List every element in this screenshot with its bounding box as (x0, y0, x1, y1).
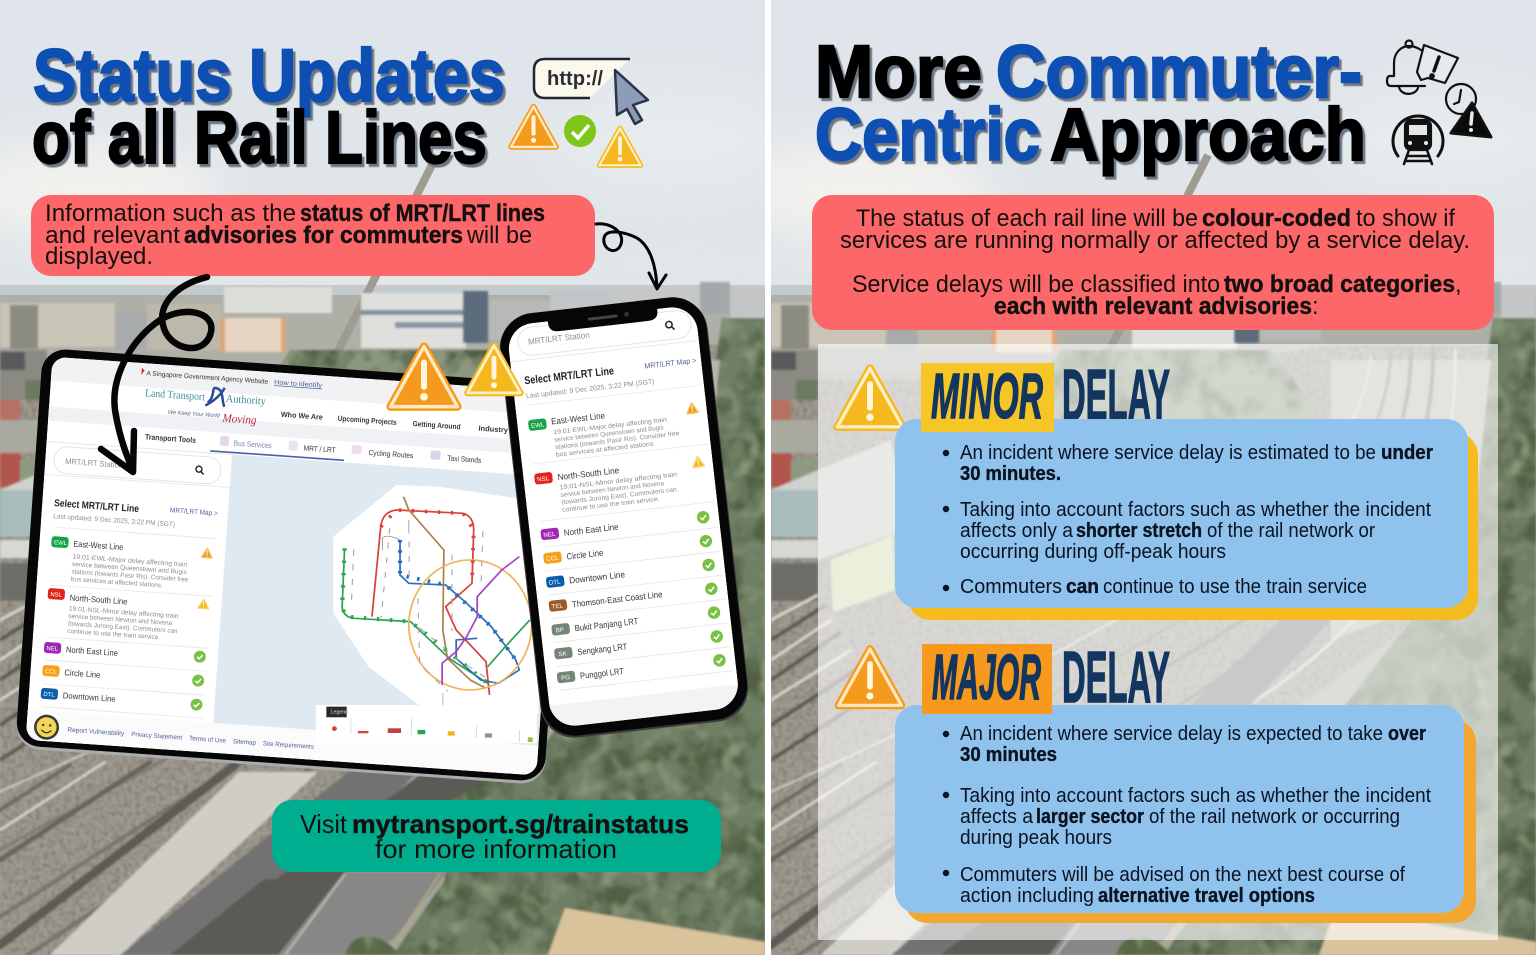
tablet body and screen: Taxi Stands (447, 454, 482, 465)
phone mockup: continue to use the train service. (562, 496, 660, 514)
tablet body and screen: DTL (43, 692, 55, 699)
icon: bell (1387, 40, 1425, 94)
icon: orange warning (839, 649, 901, 705)
callout: colour coded intro: two broad categories (1224, 271, 1455, 298)
phone mockup: EWL (531, 421, 545, 430)
tablet body and screen: continue to use the train service. (67, 628, 160, 641)
callout: colour coded intro (812, 195, 1494, 330)
panel: minor delay details (895, 419, 1478, 620)
phone mockup: NSL (537, 475, 550, 483)
phone mockup: Downtown Line (569, 569, 626, 585)
callout: colour coded intro: The status of each rail line will be (856, 205, 1198, 232)
phone mockup: Bukit Panjang LRT (574, 616, 639, 633)
callout: visit mytransport (272, 800, 721, 872)
tablet body and screen: MRT/LRT Map > (170, 507, 218, 518)
panel: minor delay details: An incident where service delay is estimated to be (960, 442, 1376, 464)
phone mockup: North East Line (563, 522, 619, 538)
tablet body and screen: North East Line (66, 644, 118, 658)
tablet body and screen: MRT/LRT Station (65, 457, 123, 470)
panel: minor delay details: affects only a (960, 520, 1074, 542)
tag: major: MAJOR (932, 641, 1041, 713)
tablet body and screen: East-West Line (73, 539, 124, 552)
section: major delay (839, 638, 1476, 923)
icon: large orange warning on tablet (391, 347, 457, 407)
callout: visit mytransport: mytransport.sg/trainstatus (352, 809, 689, 839)
tablet body and screen: NSL (50, 592, 63, 599)
title: More Commuter-Centric Approach (815, 30, 1366, 176)
tablet body and screen: North-South Line (69, 592, 128, 607)
phone mockup: 19:01-NSL-Minor delay affecting train (559, 471, 678, 491)
tablet body and screen: Sitemap (233, 738, 257, 747)
tablet body and screen: 19:01-NSL-Minor delay affecting train (69, 605, 179, 620)
arrow: callout to phone (596, 224, 666, 289)
title: Status Updates of all Rail Lines: of all Rail Lines (32, 96, 487, 179)
panel: major delay details: affects a (960, 806, 1034, 828)
tablet body and screen: Site Requirements (263, 740, 315, 751)
tablet body and screen: We Keep Your World (168, 410, 220, 420)
title: More Commuter-Centric Approach: Centric (815, 93, 1040, 176)
tablet body and screen (15, 348, 572, 785)
section: minor delay (837, 356, 1478, 620)
phone mockup: PG (561, 674, 571, 682)
phone mockup: Select MRT/LRT Line (524, 365, 615, 387)
tablet body and screen: service between Queenstown and Bugis (72, 561, 188, 576)
tablet body and screen: bus services at affected stations. (71, 576, 163, 589)
phone mockup: service between Newton and Novena (560, 480, 665, 499)
tablet body and screen: 19:01-EWL-Major delay affecting train (72, 554, 188, 569)
title: More Commuter-Centric Approach: Approach (1050, 93, 1366, 176)
callout: information intro: and relevant (45, 222, 180, 249)
panel: major delay details: over (1388, 723, 1426, 745)
tablet body and screen: Land Transport (145, 387, 205, 403)
tablet body and screen: Getting Around (412, 419, 461, 431)
tag: minor: MINOR (931, 360, 1043, 432)
phone mockup: East-West Line (551, 410, 605, 427)
phone mockup: Circle Line (566, 548, 604, 562)
panel: minor delay details: Commuters (960, 576, 1062, 598)
icon: address bar: http:// (547, 68, 603, 90)
tablet body and screen: Select MRT/LRT Line (54, 498, 140, 515)
tablet body and screen: Industry (478, 424, 509, 435)
MRT network map (316, 485, 540, 743)
phone mockup: stations (towards Pasir Ris). Consider free (555, 430, 680, 451)
icon: train (1393, 116, 1443, 164)
tablet body and screen: Moving (221, 411, 257, 427)
icon: alert speech bubble (1417, 45, 1458, 83)
tablet body and screen: A Singapore Government Agency Website (146, 370, 269, 386)
phone mockup: Last updated: 9 Dec 2025, 3:22 PM (SGT) (526, 379, 655, 400)
tablet body and screen: Bus Services (234, 439, 272, 450)
icon: yellow warning between devices (468, 346, 520, 393)
panel: minor delay details: Taking into account factors such as whether the incident (960, 499, 1431, 521)
tablet body and screen: Report Vulnerability (67, 727, 125, 738)
phone mockup (496, 293, 752, 741)
phone mockup: 19:01-EWL-Major delay affecting train (553, 416, 668, 436)
icon: yellow warning (837, 368, 903, 427)
panel: major delay details: 30 minutes (960, 744, 1057, 766)
callout: colour coded intro: Service delays will be classified into (852, 271, 1220, 298)
panel: major delay details: alternative travel options (1098, 885, 1315, 907)
callout: colour coded intro: each with relevant advisories (994, 293, 1312, 320)
icon: orange warning (511, 107, 556, 147)
panel: major delay details: Taking into account factors such as whether the incident (960, 785, 1431, 807)
tablet body and screen: Transport Tools (145, 432, 197, 445)
icon: clock (1446, 84, 1476, 114)
phone mockup: Punggol LRT (580, 666, 625, 681)
icon group: http, cursor, warnings (511, 59, 648, 165)
panel: major delay details (895, 705, 1476, 923)
tablet body and screen: EWL (54, 540, 68, 547)
phone mockup: service between Queenstown and Bugis (554, 424, 665, 444)
tablet body and screen: stations (towards Pasir Ris). Consider free (71, 569, 189, 584)
panel: minor delay details: continue to use the train service (1103, 576, 1367, 598)
tablet body and screen: Authority (225, 393, 267, 408)
title: Status Updates of all Rail Lines: Status Updates (33, 34, 505, 117)
panel: major delay details: An incident where service delay is expected to take (960, 723, 1383, 745)
phone mockup: bus services at affected stations (556, 441, 655, 459)
tablet body and screen: service between Newton and Novena (68, 613, 173, 627)
panel: minor delay details: of the rail network or (1207, 520, 1375, 542)
phone mockup: CCL (546, 555, 559, 563)
tablet body and screen: Downtown Line (62, 690, 116, 704)
callout: colour coded intro: colour-coded (1202, 205, 1351, 232)
icon group: bell, clock warning, train (1387, 40, 1491, 164)
tablet body and screen: Who We Are (281, 410, 323, 422)
panel: major delay details: of the rail network or occurring (1149, 806, 1400, 828)
icon: cursor (615, 70, 648, 124)
phone mockup: MRT/LRT Station (527, 330, 590, 347)
panel: major delay details: Commuters will be advised on the next best course of (960, 864, 1405, 886)
phone mockup: North-South Line (557, 465, 620, 482)
translucent backing panel (818, 344, 1498, 940)
phone mockup: TEL (551, 602, 564, 611)
panel: minor delay details: under (1381, 442, 1433, 464)
phone mockup: SK (558, 650, 568, 658)
panel: minor delay details: 30 minutes. (960, 463, 1061, 485)
callout: colour coded intro: to show if (1356, 205, 1455, 232)
tablet body and screen: Cycling Routes (368, 448, 414, 460)
title: More Commuter-Centric Approach: Commuter- (996, 30, 1362, 113)
background photo: left panel (0, 0, 810, 955)
tablet body and screen: How to identify (274, 379, 323, 390)
panel: major delay details: action including (960, 885, 1094, 907)
tag: major (922, 641, 1052, 714)
phone mockup: (towards Jurong East). Commuters can (561, 486, 677, 506)
tablet body and screen: Privacy Statement (131, 731, 183, 742)
icon: yellow warning (599, 128, 641, 165)
callout: visit mytransport: for more information (375, 834, 617, 864)
callout: visit mytransport: Visit (300, 809, 348, 839)
phone mockup: BP (555, 626, 564, 634)
background photo: right panel (731, 0, 1536, 955)
callout: colour coded intro: services are running normally or affected by a service delay. (840, 227, 1470, 254)
section: major delay: DELAY (1062, 638, 1170, 718)
tablet mockup (15, 347, 572, 785)
section: minor delay: DELAY (1062, 356, 1170, 436)
panel: minor delay details: shorter stretch (1076, 520, 1202, 542)
title: Status Updates of all Rail Lines (32, 34, 505, 179)
MRT network map: Legend (331, 710, 348, 716)
title: More Commuter-Centric Approach: More (815, 30, 982, 113)
phone mockup: Thomson-East Coast Line (571, 589, 663, 609)
tablet body and screen: NEL (46, 646, 59, 653)
arrow: callout to tablet (101, 277, 211, 472)
tablet body and screen: Last updated: 9 Dec 2025, 3:22 PM (SGT) (53, 513, 175, 529)
panel: major delay details: larger sector (1036, 806, 1144, 828)
callout: information intro: displayed. (45, 243, 153, 270)
tablet body and screen: Terms of Use (189, 735, 227, 745)
callout: information intro (31, 195, 595, 276)
callout: information intro: status of MRT/LRT lines (300, 200, 545, 227)
callout: colour coded intro: : (1312, 293, 1319, 320)
tablet body and screen: MRT / LRT (303, 443, 336, 455)
phone mockup: NEL (543, 531, 556, 539)
panel: minor delay details: can (1066, 576, 1099, 598)
phone mockup: Sengkang LRT (577, 641, 628, 657)
callout: colour coded intro: , (1455, 271, 1462, 298)
tablet body and screen: Circle Line (64, 667, 101, 680)
callout: information intro: will be (466, 222, 532, 249)
tablet body and screen: Upcoming Projects (338, 414, 397, 427)
phone mockup: DTL (549, 578, 561, 587)
tablet body and screen: CCL (45, 669, 58, 676)
callout: information intro: advisories for commuters (184, 222, 463, 249)
icon: green check (564, 115, 596, 147)
tablet body and screen: (towards Jurong East). Commuters can (68, 620, 178, 635)
panel: minor delay details: occurring during off-peak hours (960, 541, 1226, 563)
callout: information intro: Information such as the (45, 200, 296, 227)
phone mockup: MRT/LRT Map > (644, 356, 697, 371)
tag: minor (921, 360, 1054, 432)
panel: major delay details: during peak hours (960, 827, 1112, 849)
icon: black warning triangle (1451, 103, 1491, 137)
